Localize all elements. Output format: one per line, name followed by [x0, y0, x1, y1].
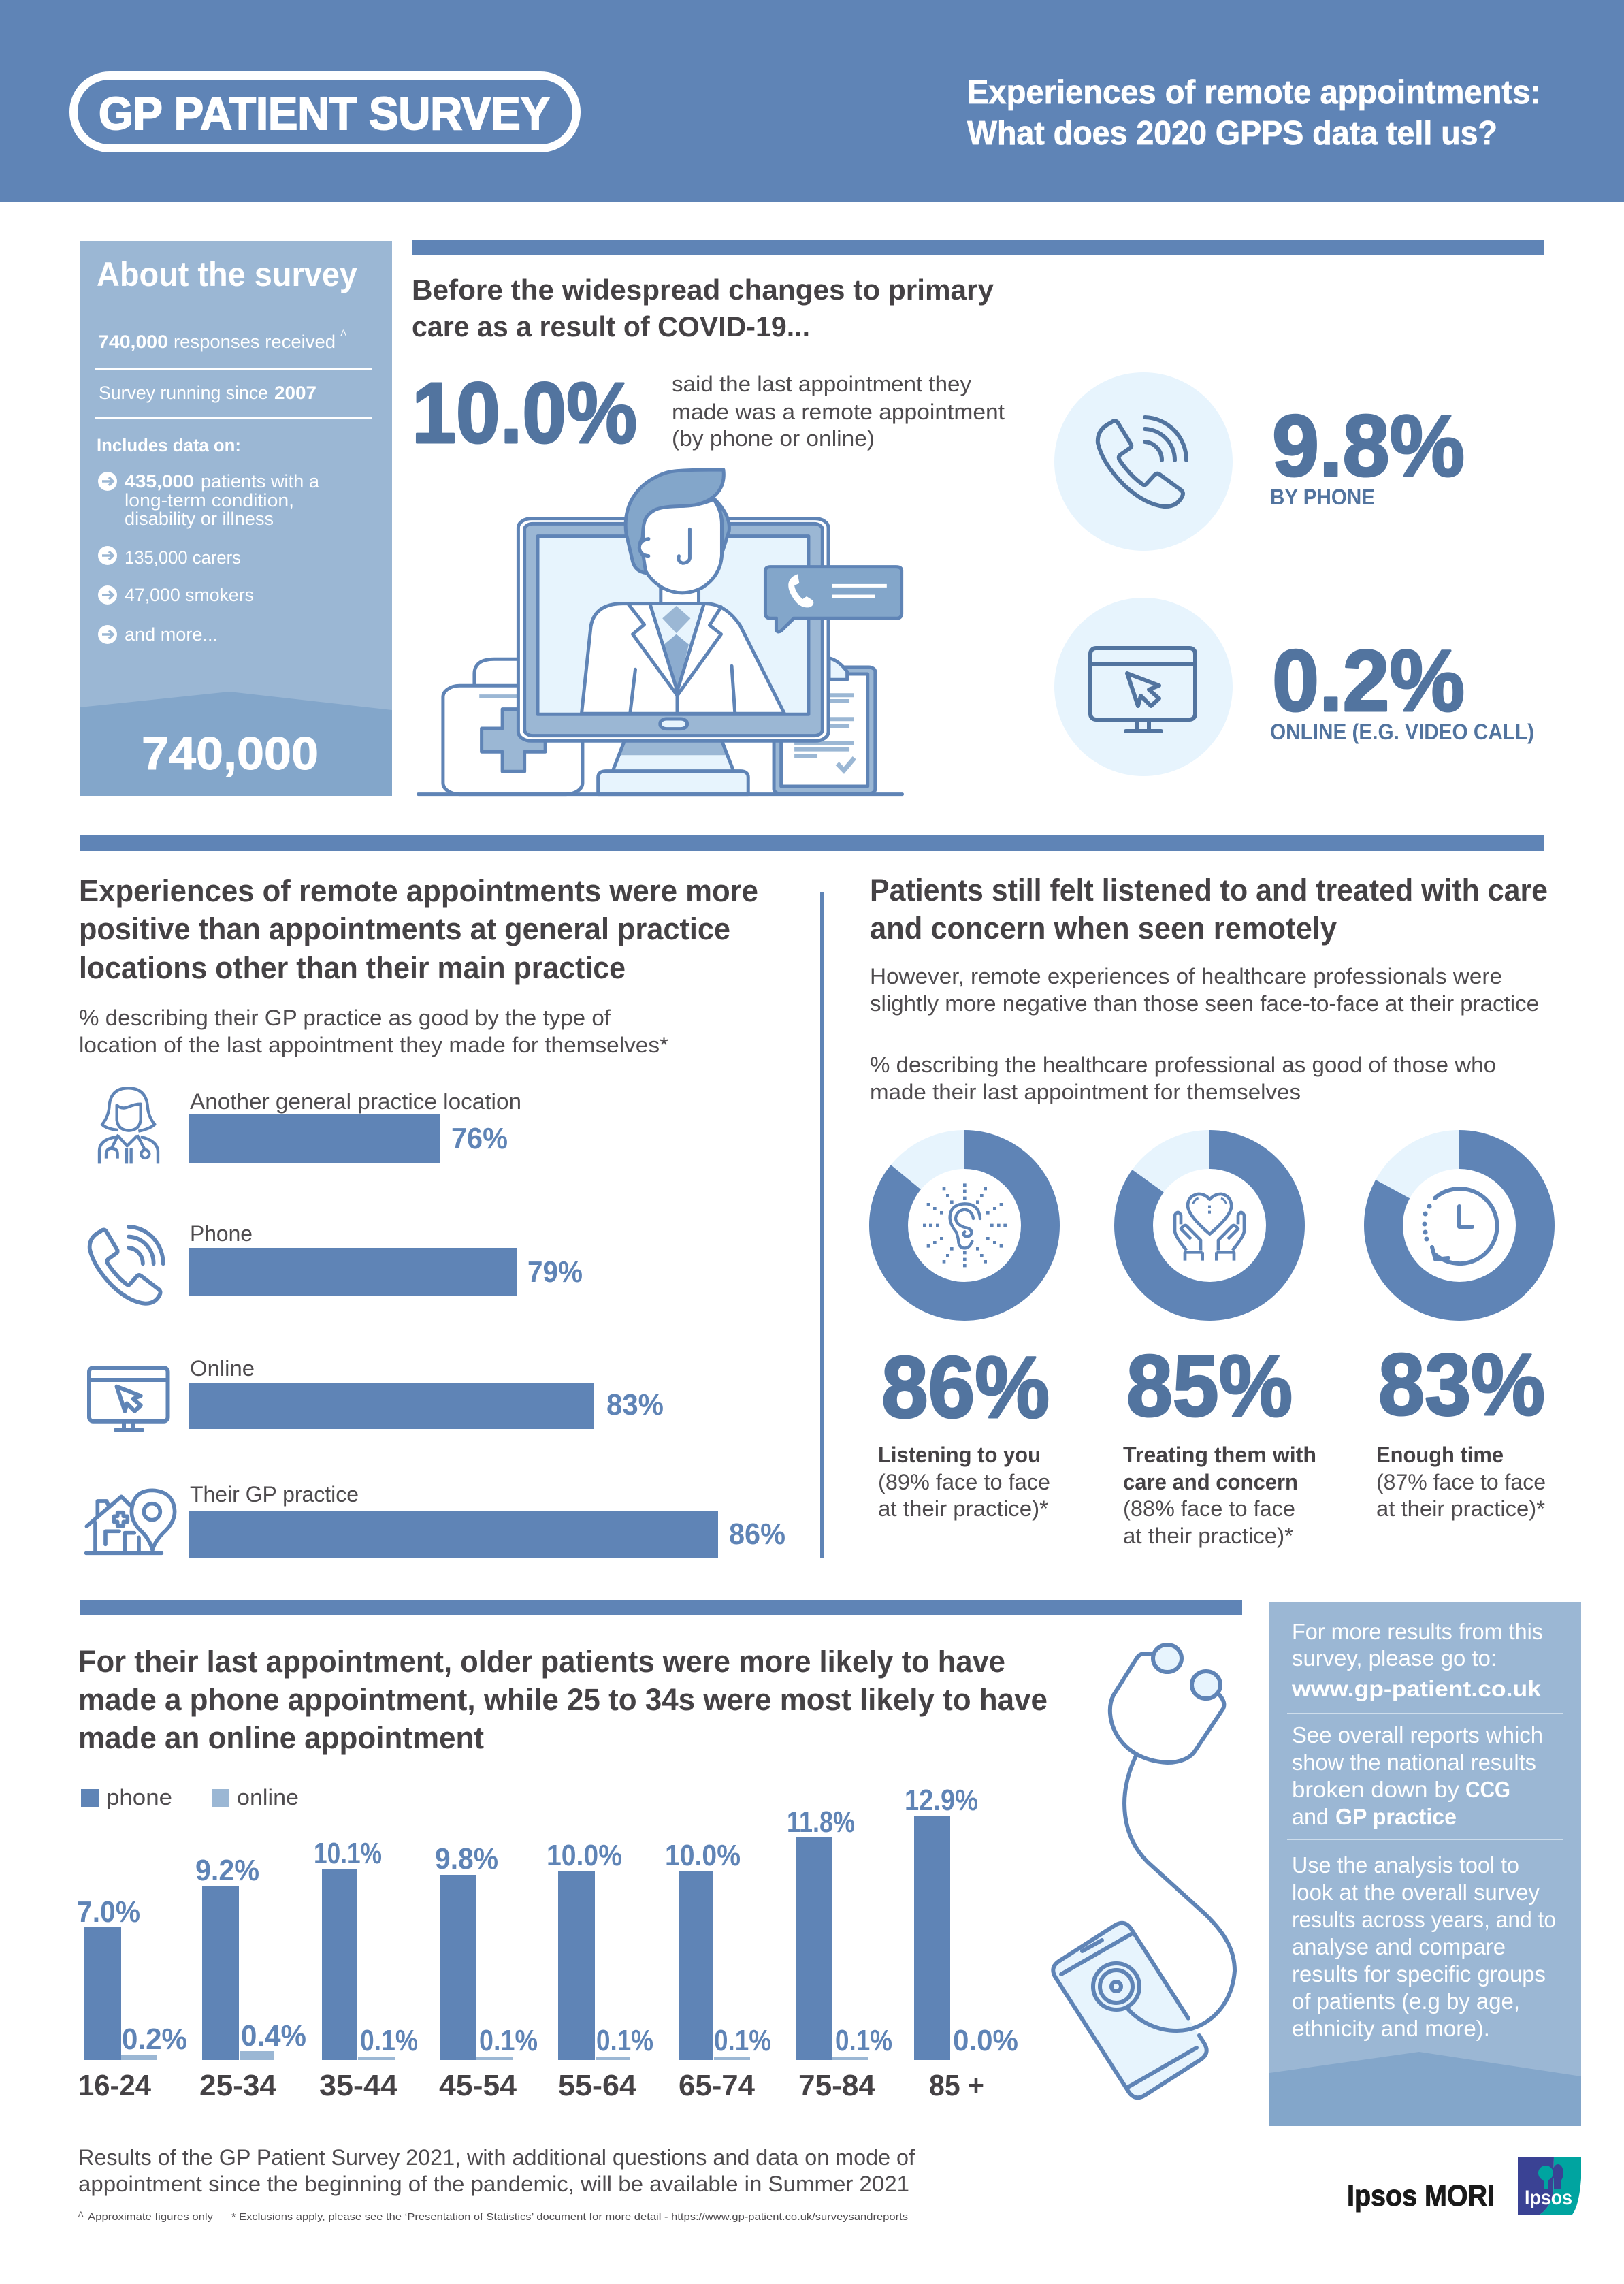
- heading: older patients: [78, 1644, 1048, 1755]
- description: remote appointment: said the last appointment they: [672, 372, 971, 396]
- legend: [81, 1785, 299, 1809]
- big stat: 10.0%: 10.0%: [412, 365, 637, 461]
- description: remote appointment: [672, 372, 1005, 451]
- icon: monitor with cursor: [1090, 648, 1195, 731]
- text: analysis tool: results across years, and to: [1292, 1907, 1556, 1932]
- subheading: bar chart description: [79, 1006, 668, 1057]
- stat block: online: [1054, 598, 1534, 776]
- text: however remote experiences: However, remote experiences of healthcare professionals were: [870, 964, 1502, 988]
- group: 65-74: [665, 1839, 771, 2102]
- bullet: 435,000 patients: 435,000: [125, 471, 194, 492]
- text: overall reports: CCG: [1465, 1777, 1510, 1802]
- bullet: and more: and more...: [125, 624, 218, 645]
- bar row: phone: Phone: [190, 1221, 253, 1246]
- group: 45-54: 9.8%: [435, 1842, 498, 1876]
- group: 85+: [905, 1784, 1018, 2102]
- bullet: carers: 135,000 carers: [125, 547, 241, 568]
- group: 45-54: 0.1%: [479, 2024, 538, 2057]
- heading: about the survey: About the survey: [97, 255, 357, 293]
- bar row: online: [89, 1356, 664, 1430]
- icon: heart in hands: [1175, 1194, 1244, 1261]
- heading: experiences of remote appointments: positive than appointments at general practice: [79, 912, 730, 946]
- icon: monitor with cursor: [89, 1368, 167, 1430]
- footnotes: [78, 2210, 908, 2223]
- heading: patients still felt listened to: Patients still felt listened to and treated with care: [870, 873, 1548, 907]
- group: 55-64: 10.0%: [547, 1839, 622, 1872]
- bullet: 435,000 patients: disability or illness: [125, 509, 274, 529]
- text: website: [1291, 1619, 1543, 1701]
- subheading: bar chart description: % describing their GP practice as good by the type of: [79, 1006, 611, 1030]
- group: 25-34: [195, 1854, 306, 2102]
- bar row: another general practice location: 76%: [451, 1122, 508, 1155]
- bar row: their GP practice: Their GP practice: [190, 1482, 359, 1507]
- stat: 85% care and concern: (88% face to face: [1123, 1496, 1295, 1521]
- stat: 86% listening: at their practice)*: [878, 1496, 1048, 1521]
- heading: patients still felt listened to: [870, 873, 1548, 946]
- monitor stand: [598, 741, 748, 794]
- stat: 85% care and concern: Treating them with: [1123, 1443, 1316, 1467]
- text: overall reports: and: [1292, 1804, 1329, 1829]
- medical bag: [443, 659, 583, 794]
- text: analysis tool: analyse and compare: [1292, 1934, 1506, 1959]
- text: overall reports: See overall reports which: [1292, 1722, 1543, 1748]
- label: online: ONLINE (E.G. VIDEO CALL): [1270, 720, 1534, 744]
- logo: Ipsos badge: Ipsos: [1525, 2187, 1572, 2209]
- group: 25-34: 0.4%: [241, 2019, 306, 2053]
- group: 85+: 12.9%: [905, 1784, 978, 1817]
- panel: listened to and treated with care: [870, 873, 1548, 1548]
- group: 35-44: [314, 1837, 418, 2102]
- group: 85+: 0.0%: [953, 2024, 1018, 2057]
- icon: house with pin: [86, 1490, 175, 1553]
- group: 65-74: 0.1%: [714, 2024, 771, 2057]
- value: 0.2%: 0.2%: [1272, 632, 1465, 730]
- panel: about the survey: [80, 241, 392, 796]
- stat: 85% care and concern: care and concern: [1123, 1470, 1298, 1494]
- illustration: doctor on monitor: [419, 470, 903, 794]
- heading: older patients: For their last appointment, older patients were more likely to have: [78, 1644, 1005, 1679]
- icon: female doctor: [99, 1088, 158, 1163]
- donut: care and concern: [1134, 1149, 1285, 1302]
- legend: phone: [106, 1785, 172, 1809]
- header banner: [0, 0, 1624, 202]
- text: analysis tool: Use the analysis tool to: [1292, 1852, 1519, 1878]
- label: by phone: BY PHONE: [1270, 485, 1375, 509]
- monitor: [518, 519, 828, 741]
- title: What does 2020 GPPS data tell us?: [967, 115, 1497, 152]
- donut: enough time: [1383, 1149, 1536, 1302]
- description: remote appointment: (by phone or online): [672, 426, 875, 451]
- group: 16-24: 16-24: [78, 2069, 151, 2102]
- section: age breakdown: [77, 1600, 1242, 2102]
- subheading: describing the healthcare professional: made their last appointment for themselves: [870, 1080, 1301, 1104]
- footer note: results of 2021 survey: Results of the GP Patient Survey 2021, with additional questions and data on mode of: [78, 2145, 915, 2170]
- text: website: www.gp-patient.co.uk: [1291, 1676, 1542, 1701]
- doctor figure: [581, 470, 785, 713]
- text: analysis tool: results for specific groups: [1292, 1961, 1546, 1987]
- panel: more results: [1269, 1602, 1581, 2126]
- stat: survey running since: Survey running since: [99, 383, 268, 403]
- subheading: bar chart description: location of the last appointment they made for themselves*: [79, 1033, 668, 1057]
- title: [967, 74, 1541, 152]
- heading: experiences of remote appointments: Experiences of remote appointments were more: [79, 873, 758, 908]
- bullet: 435,000 patients: [98, 471, 320, 529]
- heading: experiences of remote appointments: locations other than their main practice: [79, 950, 626, 985]
- stat: 86% listening: Listening to you: [878, 1443, 1041, 1467]
- bar row: another general practice location: Another general practice location: [190, 1089, 521, 1114]
- group: 85+: 85 +: [929, 2069, 984, 2102]
- group: 55-64: 0.1%: [596, 2024, 653, 2057]
- footnotes: * Exclusions apply, please see the ‘Presentation of Statistics’ document for more detail - https://www.gp-patient.co.uk/surveysandreports: [231, 2211, 908, 2223]
- bullet: smokers: 47,000 smokers: [125, 585, 254, 605]
- heading: experiences of remote appointments: [79, 873, 758, 985]
- stat: 86% listening: (89% face to face: [878, 1470, 1050, 1494]
- bar chart: phone and online by age: [77, 1784, 1018, 2102]
- stethoscope tube: [1110, 1654, 1224, 1763]
- bar row: their GP practice: [86, 1482, 785, 1558]
- bar row: online: 83%: [606, 1388, 664, 1421]
- group: 16-24: 0.2%: [122, 2023, 187, 2056]
- text: however remote experiences: slightly more negative than those seen face-to-face at their practice: [870, 991, 1539, 1016]
- bullet: 435,000 patients: patients with a: [201, 471, 320, 492]
- heading: older patients: made an online appointment: [78, 1720, 484, 1755]
- footnotes: Approximate figures only: [88, 2211, 214, 2223]
- group: 55-64: 55-64: [558, 2069, 637, 2102]
- stat block: by phone: [1054, 372, 1465, 551]
- text: analysis tool: ethnicity and more).: [1292, 2016, 1490, 2041]
- text: analysis tool: look at the overall survey: [1292, 1880, 1540, 1905]
- text: overall reports: GP practice: [1335, 1804, 1457, 1829]
- footer note: results of 2021 survey: appointment since the beginning of the pandemic, will be available in Summer 2021: [78, 2172, 909, 2196]
- heading: older patients: made a phone appointment, while 25 to 34s were most likely to have: [78, 1682, 1048, 1717]
- stat: survey running since: 2007: [274, 383, 316, 403]
- group: 65-74: 10.0%: [665, 1839, 741, 1872]
- group: 25-34: 25-34: [199, 2069, 277, 2102]
- stat: 83% enough time: 83%: [1378, 1336, 1545, 1434]
- stat: responses received: [98, 327, 347, 352]
- subheading: describing the healthcare professional: % describing the healthcare professional as good of those who: [870, 1052, 1496, 1077]
- clipboard: [774, 658, 875, 794]
- bar row: their GP practice: 86%: [729, 1517, 785, 1551]
- group: 16-24: 7.0%: [77, 1895, 140, 1929]
- section: before COVID-19: [412, 240, 1544, 794]
- donut: listening to you: [889, 1149, 1040, 1302]
- stat: 86% listening: 86%: [881, 1339, 1050, 1436]
- group: 45-54: 45-54: [439, 2069, 517, 2102]
- group: 45-54: [435, 1842, 538, 2102]
- text: overall reports: [1292, 1722, 1543, 1829]
- group: 75-84: [787, 1805, 892, 2102]
- bullet: 435,000 patients: long-term condition,: [125, 490, 294, 511]
- logo: GP Patient Survey: GP PATIENT SURVEY: [99, 88, 550, 140]
- description: remote appointment: made was a remote appointment: [672, 400, 1005, 424]
- stat: 86% listening: [878, 1339, 1050, 1521]
- bar row: phone: 79%: [527, 1255, 583, 1289]
- bar row: online: Online: [190, 1356, 255, 1381]
- big number: 740,000: 740,000: [142, 728, 319, 779]
- icon: phone: [90, 1227, 163, 1304]
- text: analysis tool: [1292, 1852, 1556, 2041]
- stat: 83% enough time: at their practice)*: [1376, 1496, 1545, 1521]
- stat: 83% enough time: [1376, 1336, 1546, 1521]
- group: 35-44: 0.1%: [360, 2024, 418, 2057]
- heading: before the widespread changes: care as a result of COVID-19...: [412, 310, 810, 342]
- stat: 83% enough time: (87% face to face: [1376, 1470, 1546, 1494]
- title: Experiences of remote appointments:: [967, 74, 1541, 111]
- logo: Ipsos badge: [1518, 2157, 1581, 2215]
- stat: 83% enough time: Enough time: [1376, 1443, 1504, 1467]
- group: 65-74: 65-74: [679, 2069, 756, 2102]
- group: 16-24: [77, 1895, 187, 2102]
- smartphone: [1049, 1919, 1211, 2102]
- group: 75-84: 0.1%: [835, 2024, 892, 2057]
- heading: before the widespread changes: Before the widespread changes to primary: [412, 274, 994, 306]
- speech bubble with phone: [765, 567, 902, 632]
- bar row: another general practice location: [99, 1088, 521, 1163]
- icon: clock: [1425, 1189, 1497, 1264]
- icon: ear with sound rays: [923, 1183, 1007, 1267]
- group: 35-44: 35-44: [319, 2069, 398, 2102]
- logo: GP Patient Survey: [74, 76, 576, 148]
- bar row: phone: [90, 1221, 583, 1304]
- text: overall reports: show the national results: [1292, 1750, 1536, 1775]
- group: 75-84: 11.8%: [787, 1805, 855, 1839]
- heading: before the widespread changes: [412, 274, 994, 342]
- text: overall reports: broken down by: [1292, 1777, 1460, 1802]
- value: 9.8%: 9.8%: [1272, 398, 1465, 495]
- illustration: stethoscope and smartphone: [1049, 1645, 1235, 2102]
- text: website: survey, please go to:: [1292, 1645, 1497, 1671]
- stat: 85% care and concern: at their practice)*: [1123, 1524, 1293, 1548]
- group: 35-44: 10.1%: [314, 1837, 382, 1870]
- text: analysis tool: of patients (e.g by age,: [1292, 1989, 1520, 2014]
- legend: online: [237, 1785, 299, 1809]
- logo: Ipsos MORI wordmark: Ipsos MORI: [1347, 2179, 1495, 2213]
- stat: 85% care and concern: 85%: [1126, 1338, 1293, 1435]
- footnotes: A: [78, 2210, 84, 2219]
- panel: general practice location comparison: [79, 873, 785, 1558]
- stat: responses received: responses received: [174, 332, 336, 352]
- stat: responses received: A: [340, 327, 347, 338]
- footer note: results of 2021 survey: [78, 2145, 915, 2196]
- group: 55-64: [547, 1839, 653, 2102]
- text: however remote experiences: [870, 964, 1539, 1016]
- subheading: includes data on: Includes data on:: [97, 435, 241, 455]
- icon: phone: [1098, 417, 1186, 506]
- group: 25-34: 9.2%: [195, 1854, 259, 1887]
- heading: patients still felt listened to: and concern when seen remotely: [870, 911, 1337, 946]
- stat: 85% care and concern: [1123, 1338, 1316, 1548]
- stat: responses received: 740,000: [98, 332, 168, 352]
- group: 75-84: 75-84: [798, 2069, 876, 2102]
- text: website: For more results from this: [1292, 1619, 1543, 1644]
- subheading: describing the healthcare professional: [870, 1052, 1496, 1104]
